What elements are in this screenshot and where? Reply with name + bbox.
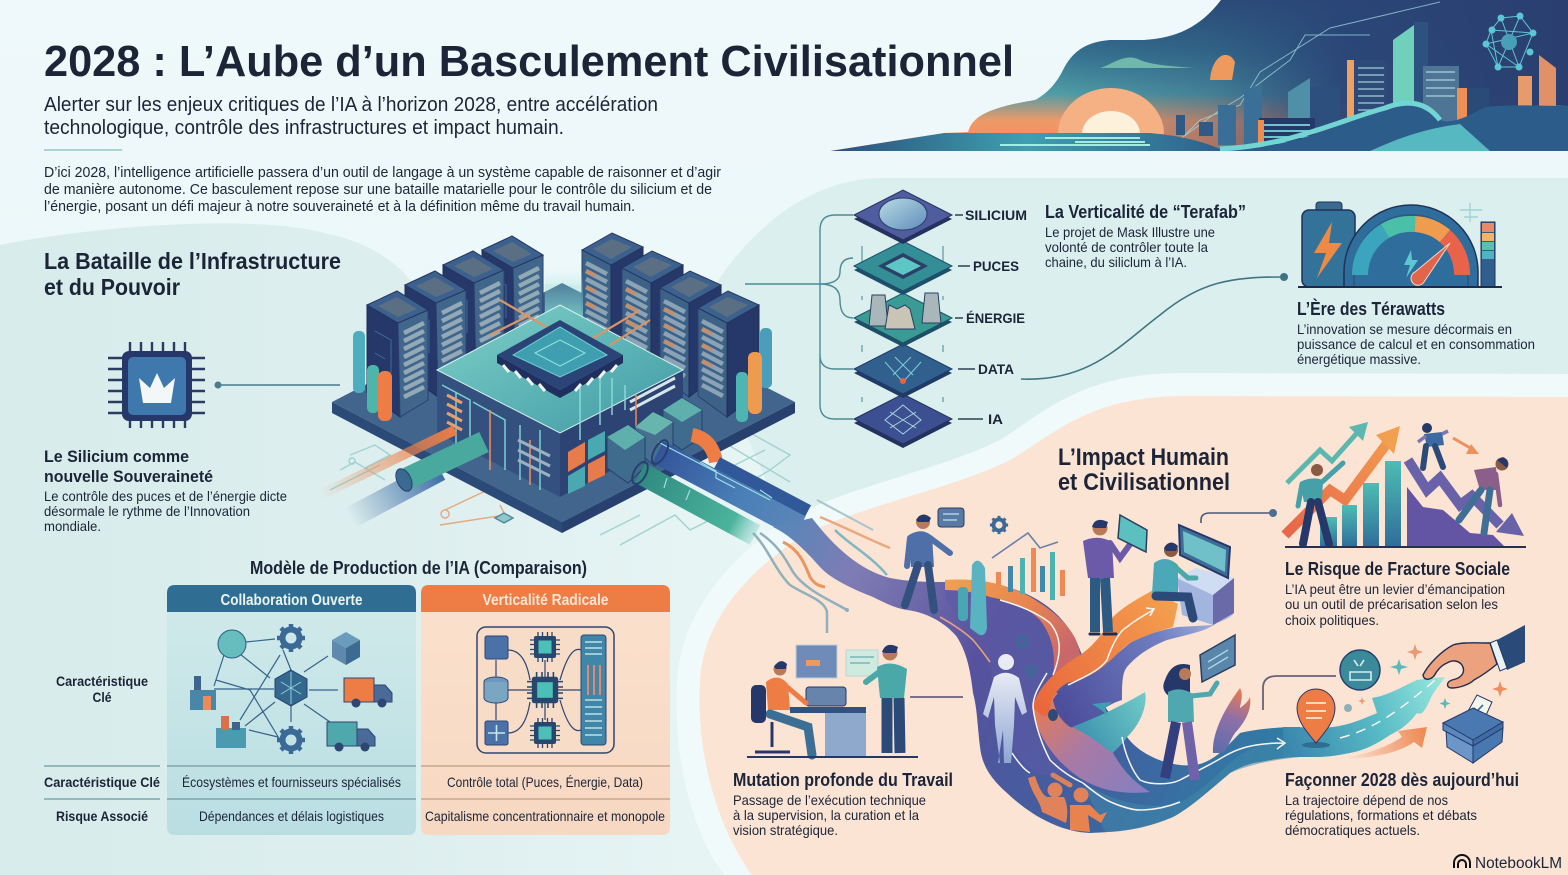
- row cells: [182, 774, 665, 824]
- figure: desk scene supervision: [747, 645, 918, 757]
- water: [830, 133, 1225, 151]
- layer: SILICIUM: [854, 190, 952, 244]
- orange arrow: [1285, 426, 1400, 535]
- figure: climber left: [1298, 463, 1343, 544]
- teal ribbon to hand: [1283, 677, 1445, 757]
- server towers right: [582, 233, 759, 417]
- title: 2028 : L’Aube d’un Basculement Civilisationnel: [44, 37, 1014, 86]
- row labels: Caractéristique Clé: [44, 774, 160, 790]
- teal arrow: [1287, 422, 1368, 483]
- icon: reaching hand: [1423, 625, 1525, 688]
- text: Terafab: chaine, du siliclum à l’IA.: [1045, 254, 1187, 270]
- connector: desk scene to road: [910, 696, 963, 698]
- intro paragraph: de manière autonome. Ce basculement repose sur une bataille matarielle pour le contrôle du silicium et de: [44, 182, 712, 198]
- illustration: shaping 2028 hand, pin, ballot: [1263, 625, 1525, 763]
- column: open collaboration: Collaboration Ouverte: [220, 592, 363, 609]
- diagram: vertical integration: [477, 627, 614, 753]
- row cells: Capitalisme concentrationnaire et monopole: [425, 808, 665, 824]
- orange branch: [1033, 590, 1178, 716]
- text: mutation du travail: Passage de l’exécution technique: [733, 792, 926, 808]
- bars: [1320, 461, 1401, 547]
- layer: ÉNERGIE: [854, 293, 952, 347]
- road white lines: [1000, 600, 1435, 810]
- figure: seated man at monitor: [1152, 525, 1234, 625]
- stack labels: IA: [988, 411, 1003, 427]
- orange arrow: [1345, 727, 1427, 759]
- right pipes: [629, 435, 808, 535]
- heading: human impact: [1058, 444, 1230, 496]
- text: silicium souveraineté: nouvelle Souveraineté: [44, 467, 213, 486]
- road ribbon illustration: [773, 518, 1445, 833]
- table: production model comparison: [44, 558, 670, 835]
- rose lane: [1033, 685, 1150, 793]
- layer: PUCES: [854, 241, 952, 295]
- periwinkle band: [1053, 613, 1234, 730]
- figure: falling man: [1459, 457, 1508, 533]
- text: Terafab: volonté de contrôler toute la: [1045, 239, 1208, 255]
- heading: infrastructure: [44, 248, 341, 300]
- figure: ghost silhouette: [983, 654, 1027, 763]
- row labels: Risque Associé: [56, 808, 148, 824]
- row labels: [44, 673, 160, 824]
- background shape: left infrastructure zone: [0, 223, 760, 875]
- text: Térawatts: L’Ère des Térawatts: [1297, 298, 1445, 319]
- figure: woman with tablet: [1163, 635, 1235, 780]
- text: silicium souveraineté: Le Silicium comme: [44, 447, 189, 466]
- road inner purple lane: [945, 590, 1073, 775]
- text: silicium souveraineté: désormale le rythme de l’Innovation: [44, 503, 250, 519]
- heading: human impact: L’Impact Humain: [1058, 444, 1229, 471]
- orange cable traces: [490, 300, 650, 345]
- left pipes: [320, 430, 484, 518]
- tubes right: [736, 328, 772, 422]
- peach zone: human impact: [676, 373, 1568, 875]
- intro paragraph: l’énergie, posant un défi majeur à notre souveraineté et à la définition même du travail humain.: [44, 199, 635, 215]
- text: Terafab: [1045, 202, 1246, 270]
- intro paragraph: [44, 165, 721, 215]
- heading: infrastructure: La Bataille de l’Infrastructure: [44, 248, 341, 274]
- text: fracture sociale: L’IA peut être un levier d’émancipation: [1285, 581, 1505, 597]
- stack labels: SILICIUM: [965, 207, 1027, 223]
- glow column: [545, 270, 583, 320]
- heading: infrastructure: et du Pouvoir: [44, 274, 180, 300]
- text: silicium souveraineté: [44, 447, 287, 534]
- connector: chip to data center: [214, 382, 340, 388]
- flame: [1213, 688, 1250, 753]
- subtitle: Alerter sur les enjeux critiques de l’IA à l’horizon 2028, entre accélération: [44, 94, 658, 116]
- NotebookLM logo: NotebookLM: [1475, 855, 1562, 872]
- column: open collaboration: [167, 585, 416, 835]
- text: Térawatts: [1297, 298, 1535, 367]
- text: mutation du travail: à la supervision, la curation et la: [733, 807, 919, 823]
- text: fracture sociale: ou un outil de précarisation selon les: [1285, 596, 1498, 612]
- subtitle: technologique, contrôle des infrastructures et impact humain.: [44, 117, 564, 139]
- table title: Modèle de Production de l’IA (Comparaison): [250, 558, 587, 578]
- text: Terafab: Le projet de Mask Illustre une: [1045, 224, 1215, 240]
- stack labels: DATA: [978, 361, 1014, 377]
- right connector boxes: [607, 398, 702, 483]
- text: façonner 2028: [1285, 770, 1519, 838]
- text: façonner 2028: La trajectoire dépend de nos: [1285, 792, 1448, 808]
- text: Térawatts: énergétique massive.: [1297, 351, 1421, 367]
- icon: battery and gauge: [1298, 202, 1502, 287]
- stack labels: [955, 207, 1027, 427]
- layer: DATA: [854, 344, 952, 398]
- tubes left: [353, 331, 392, 421]
- row cells: Dépendances et délais logistiques: [199, 808, 384, 824]
- connector: chart to seated man: [1201, 509, 1277, 523]
- icon: location pin: [1297, 689, 1335, 748]
- stack labels: PUCES: [973, 258, 1019, 274]
- text: silicium souveraineté: Le contrôle des puces et de l’énergie dicte: [44, 488, 287, 504]
- figure: orange crowd: [1028, 775, 1107, 832]
- text: silicium souveraineté: mondiale.: [44, 518, 101, 534]
- text: mutation du travail: [733, 770, 953, 838]
- purple zigzag arrow: [1408, 460, 1524, 536]
- cube block: [437, 370, 560, 497]
- heading: human impact: et Civilisationnel: [1058, 469, 1230, 496]
- text: fracture sociale: choix politiques.: [1285, 612, 1379, 628]
- row cells: Écosystèmes et fournisseurs spécialisés: [182, 774, 401, 790]
- text: fracture sociale: Le Risque de Fracture Sociale: [1285, 559, 1510, 579]
- icon: circle regulation: [1340, 650, 1380, 690]
- figure: walking man: [905, 508, 964, 610]
- circuit traces: [330, 430, 790, 545]
- text: façonner 2028: régulations, formations et débats: [1285, 807, 1477, 823]
- platform: [332, 283, 795, 522]
- wave: [1220, 102, 1568, 151]
- row cells: Contrôle total (Puces, Énergie, Data): [447, 774, 643, 790]
- header banner illustration: [830, 0, 1568, 151]
- text: Terafab: La Verticalité de “Terafab”: [1045, 202, 1246, 222]
- stack: Terafab layers: [854, 190, 952, 448]
- road base: [773, 518, 1300, 833]
- column: radical verticality: [421, 585, 670, 835]
- figure: teal creature and chart: [958, 516, 1065, 635]
- column: radical verticality: Verticalité Radicale: [482, 592, 609, 609]
- text: mutation du travail: vision stratégique.: [733, 822, 838, 838]
- road blue lower lane: [1083, 738, 1300, 832]
- text: façonner 2028: Façonner 2028 dès aujourd’hui: [1285, 770, 1519, 790]
- diagram: supplier network: [190, 624, 392, 754]
- connector: data to térawatts: [1021, 273, 1288, 379]
- row labels: Clé: [92, 689, 112, 705]
- illustration: social fracture chart: [1285, 422, 1526, 547]
- layer: IA: [854, 394, 952, 448]
- subtitle: [44, 94, 658, 139]
- central chip: [497, 320, 623, 398]
- connector: data center to stack: [745, 215, 853, 419]
- figure: man with tablet: [1083, 515, 1147, 634]
- text: façonner 2028: démocratiques actuels.: [1285, 822, 1420, 838]
- text: fracture sociale: [1285, 559, 1510, 628]
- mountain: [1407, 487, 1505, 547]
- text: mutation du travail: Mutation profonde du Travail: [733, 770, 953, 790]
- row labels: Caractéristique: [56, 673, 148, 689]
- neural globe: [1483, 13, 1536, 70]
- teal wing: [1072, 692, 1146, 753]
- sparkles: [1344, 644, 1508, 712]
- background shape: right terafab zone: [716, 178, 1568, 560]
- data streams from pipes: [753, 500, 890, 633]
- icon: crown chip: [108, 342, 205, 428]
- teal bird mark: [1092, 702, 1112, 716]
- stack labels: ÉNERGIE: [966, 310, 1025, 326]
- data center isometric illustration: [320, 233, 808, 545]
- text: Térawatts: L’innovation se mesure décormais en: [1297, 321, 1512, 337]
- icon: ballot box: [1443, 695, 1503, 763]
- intro paragraph: D’ici 2028, l’intelligence artificielle passera d’un outil de langage à un système capable de raisonner et d’agir: [44, 165, 721, 181]
- road orange top: [945, 580, 1080, 675]
- text: Térawatts: puissance de calcul et en consommation: [1297, 336, 1535, 352]
- server towers left: [367, 236, 543, 417]
- road gears: [1015, 635, 1037, 677]
- figure: runner top: [1418, 423, 1448, 468]
- skyline: [1176, 22, 1568, 151]
- sun: [1058, 88, 1164, 134]
